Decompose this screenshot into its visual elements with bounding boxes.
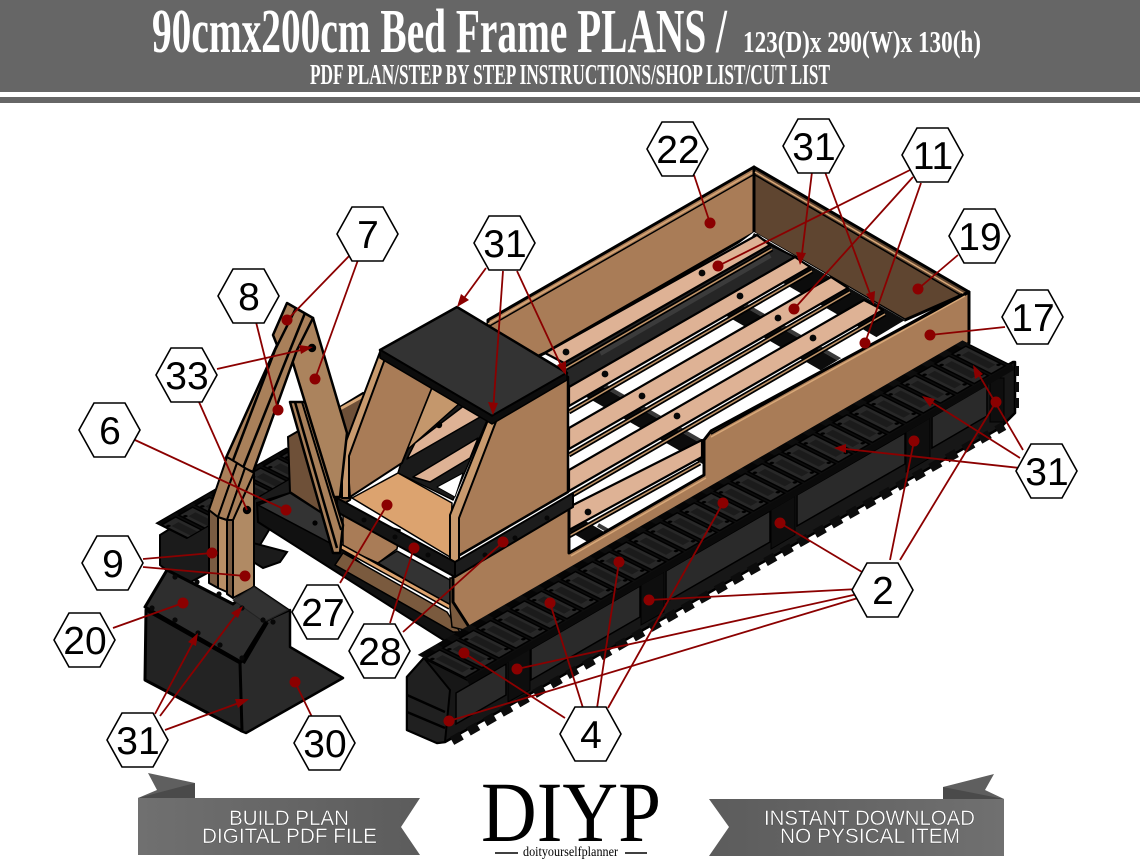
label 7 bbox=[337, 207, 398, 261]
cab window with slats bbox=[398, 388, 488, 500]
lower arm: panel 9 bbox=[209, 457, 254, 598]
slat 2 bbox=[569, 257, 812, 412]
label 17 bbox=[1002, 290, 1063, 344]
label 31 bucket: 31 bbox=[116, 720, 160, 763]
front leg bbox=[225, 303, 313, 472]
cab bbox=[337, 307, 573, 577]
header banner bbox=[0, 0, 1140, 103]
label 31 bucket bbox=[107, 713, 168, 767]
main track bbox=[407, 340, 1017, 743]
label 31 cab bbox=[474, 216, 535, 270]
label 28: 28 bbox=[358, 631, 402, 674]
label 30: 30 bbox=[303, 723, 347, 766]
body wall: panel 17 bbox=[453, 292, 969, 630]
label 31 cab: 31 bbox=[483, 223, 527, 266]
label 31 top: 31 bbox=[792, 126, 836, 169]
label 9 bbox=[82, 536, 143, 590]
label 31 track bbox=[1016, 444, 1077, 498]
ribbon: build plan: BUILD PLAN bbox=[229, 807, 349, 830]
slat 3 bbox=[569, 277, 850, 455]
excavator arm bbox=[209, 303, 347, 598]
label 27: 27 bbox=[301, 592, 345, 635]
bucket top: panel 20 bbox=[145, 570, 288, 662]
label 2 bbox=[852, 563, 913, 617]
ribbon: instant download: INSTANT DOWNLOAD bbox=[764, 807, 975, 830]
cab right panel bbox=[453, 377, 568, 559]
dark bay bbox=[564, 245, 795, 387]
slat 1 bbox=[545, 235, 772, 368]
logo: DIYP: doityourselfplanner bbox=[523, 845, 618, 860]
slat 4 bbox=[569, 300, 885, 497]
cross beam bbox=[257, 393, 458, 641]
label 19: 19 bbox=[958, 216, 1002, 259]
front band: panel 28 bbox=[337, 498, 455, 577]
leader lines bbox=[113, 170, 1023, 730]
label 33: 33 bbox=[165, 355, 209, 398]
label 4 bbox=[560, 707, 621, 761]
label 17: 17 bbox=[1011, 297, 1055, 340]
side band bbox=[455, 493, 573, 577]
label 11: 11 bbox=[913, 135, 953, 178]
label 8 bbox=[218, 269, 279, 323]
label 11 bbox=[902, 128, 963, 182]
ribbon: build plan: DIGITAL PDF FILE bbox=[202, 825, 377, 848]
label 31 track: 31 bbox=[1025, 451, 1069, 494]
label 22: 22 bbox=[656, 129, 700, 172]
back leg lower strips bbox=[290, 402, 343, 553]
track lower teeth bbox=[452, 426, 1004, 741]
label 4: 4 bbox=[580, 714, 602, 757]
seat: panel 27 bbox=[352, 473, 452, 557]
bucket bbox=[145, 570, 343, 733]
bucket side: panel 30 bbox=[240, 610, 343, 733]
label 27 bbox=[292, 585, 353, 639]
label 20 bbox=[54, 613, 115, 667]
title: 90cmx200cm Bed Frame PLANS / bbox=[152, 0, 727, 66]
label 8: 8 bbox=[238, 276, 260, 319]
label 6 bbox=[79, 403, 140, 457]
rear track bbox=[156, 448, 317, 585]
label 9: 9 bbox=[102, 543, 124, 586]
back leg main strip bbox=[289, 318, 347, 497]
label 6: 6 bbox=[99, 410, 121, 453]
track side panels bbox=[456, 385, 987, 724]
label 31 top bbox=[783, 119, 844, 173]
label 2: 2 bbox=[872, 570, 894, 613]
ribbon: instant download bbox=[709, 774, 1004, 856]
logo: DIYP: DIYP bbox=[481, 764, 661, 860]
label 7: 7 bbox=[357, 214, 379, 257]
track end face bbox=[407, 658, 450, 743]
front underside bbox=[335, 515, 472, 632]
ribbon: instant download: NO PYSICAL ITEM bbox=[780, 825, 960, 848]
cross rails bbox=[752, 233, 905, 338]
label 28 bbox=[349, 624, 410, 678]
track top blocks bbox=[418, 340, 1013, 680]
ribbon: build plan bbox=[138, 773, 420, 855]
track rim bbox=[468, 367, 1013, 682]
cab left pillar bbox=[342, 352, 386, 498]
label 30 bbox=[294, 716, 355, 770]
interior wall: panel 19 bbox=[754, 167, 969, 320]
cab front pillar bbox=[450, 415, 497, 562]
bucket front bbox=[145, 610, 242, 731]
track supports bbox=[508, 378, 1004, 702]
cab roof bbox=[380, 307, 567, 416]
label 22 bbox=[647, 122, 708, 176]
cab left panel bbox=[347, 355, 432, 497]
track right teeth bbox=[1015, 366, 1019, 412]
label 19 bbox=[949, 209, 1010, 263]
label 33 bbox=[156, 348, 217, 402]
back panel bbox=[288, 393, 385, 515]
slat 5 bbox=[569, 440, 702, 536]
interior wall: panel 22 bbox=[488, 167, 754, 360]
label 20: 20 bbox=[63, 620, 107, 663]
dimensions: 123(D)x 290(W)x 130(h) bbox=[743, 24, 981, 59]
slatted floor bbox=[545, 232, 905, 553]
slat screw holes bbox=[563, 270, 816, 515]
plate: panel 6 bbox=[258, 493, 337, 543]
